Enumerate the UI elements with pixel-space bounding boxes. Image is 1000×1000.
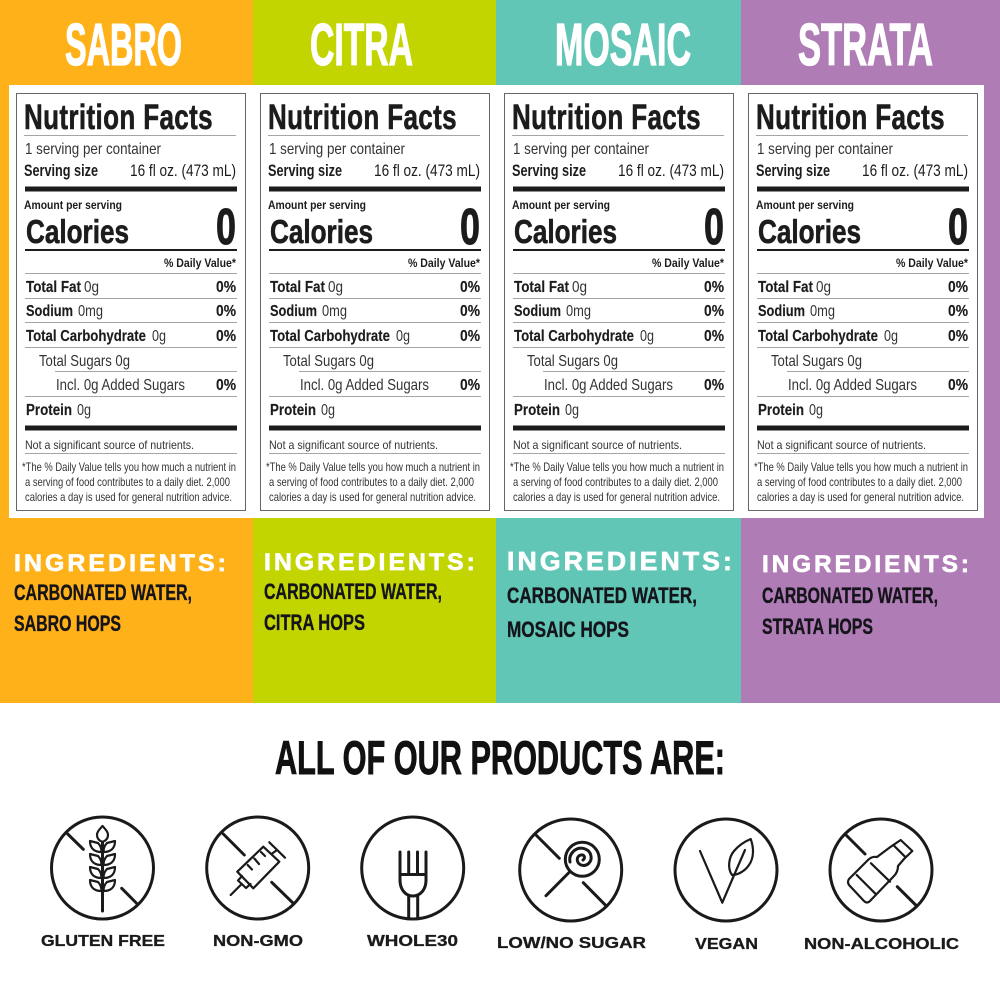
- panel: strata nutrition facts: 1 serving per container: [757, 141, 894, 158]
- panel: citra nutrition facts: 0%: [460, 328, 480, 345]
- panel: strata nutrition facts: 0: [948, 198, 968, 255]
- panel: citra nutrition facts: Calories: [270, 213, 373, 250]
- ingredients: citra: CITRA HOPS: [264, 610, 365, 635]
- panel: sabro nutrition facts: *The % Daily Value tells you how much a nutrient in: [22, 460, 236, 474]
- label: non-alcoholic: NON-ALCOHOLIC: [804, 936, 960, 953]
- panel: strata nutrition facts: Total Carbohydrate: [758, 328, 878, 345]
- panel: mosaic nutrition facts: 1 serving per container: [513, 141, 650, 158]
- panel: sabro nutrition facts: 0g: [77, 402, 91, 419]
- panel: strata nutrition facts: Not a significant source of nutrients.: [757, 438, 926, 452]
- panel: mosaic nutrition facts: Amount per serving: [512, 198, 610, 212]
- panel: citra nutrition facts: 0%: [460, 303, 480, 320]
- panel: strata nutrition facts: Incl. 0g Added Sugars: [788, 377, 917, 394]
- label: vegan: VEGAN: [695, 936, 758, 953]
- ingredients: mosaic: MOSAIC HOPS: [507, 617, 629, 642]
- ingredients: strata: STRATA HOPS: [762, 614, 873, 639]
- panel: strata nutrition facts: Total Sugars 0g: [771, 353, 862, 370]
- ingredients: mosaic: INGREDIENTS:: [507, 546, 735, 576]
- panel: mosaic nutrition facts: [504, 94, 734, 510]
- ingredients: citra: CARBONATED WATER,: [264, 579, 442, 604]
- ingredients: sabro: SABRO HOPS: [14, 611, 121, 636]
- panel: sabro nutrition facts: Total Fat: [26, 279, 82, 296]
- icon: low/no sugar lollipop: [520, 819, 622, 921]
- panel: mosaic nutrition facts: *The % Daily Value tells you how much a nutrient in: [510, 460, 724, 474]
- ingredients: sabro: INGREDIENTS:: [14, 550, 229, 577]
- panel: sabro nutrition facts: Protein: [26, 402, 72, 419]
- panel: mosaic nutrition facts: Serving size: [512, 161, 586, 180]
- panel: citra nutrition facts: 0%: [460, 279, 480, 296]
- panel: sabro nutrition facts: 0%: [216, 279, 236, 296]
- panel: strata nutrition facts: Amount per serving: [756, 198, 854, 212]
- ingredients: mosaic: CARBONATED WATER,: [507, 583, 697, 608]
- panel: sabro nutrition facts: calories a day is used for general nutrition advice.: [25, 490, 232, 504]
- icon: non-gmo syringe: [207, 817, 309, 919]
- panel: sabro nutrition facts: Amount per serving: [24, 198, 122, 212]
- ingredients: sabro: CARBONATED WATER,: [14, 580, 192, 605]
- panel: citra nutrition facts: 0%: [460, 377, 480, 394]
- panel: strata nutrition facts: Calories: [758, 213, 861, 250]
- ingredients: sabro: [14, 550, 229, 636]
- panel: mosaic nutrition facts: 0%: [704, 328, 724, 345]
- panel: citra nutrition facts: 0mg: [322, 303, 347, 320]
- icon: gluten free wheat: [52, 817, 154, 919]
- panel: sabro nutrition facts: Nutrition Facts: [24, 98, 213, 137]
- icon: non-alcoholic bottle: [830, 819, 932, 921]
- panel: citra nutrition facts: Not a significant source of nutrients.: [269, 438, 438, 452]
- panel: sabro nutrition facts: 1 serving per container: [25, 141, 162, 158]
- ingredients: strata: CARBONATED WATER,: [762, 583, 938, 608]
- panel: sabro nutrition facts: 0%: [216, 328, 236, 345]
- panel: mosaic nutrition facts: Total Sugars 0g: [527, 353, 618, 370]
- panel: citra nutrition facts: Serving size: [268, 161, 342, 180]
- panel: sabro nutrition facts: Serving size: [24, 161, 98, 180]
- panel: strata nutrition facts: 0mg: [810, 303, 835, 320]
- panel: mosaic nutrition facts: Protein: [514, 402, 560, 419]
- panel: citra nutrition facts: Amount per serving: [268, 198, 366, 212]
- icon: vegan leaf: [675, 819, 777, 921]
- panel: citra nutrition facts: Nutrition Facts: [268, 98, 457, 137]
- panel: mosaic nutrition facts: Calories: [514, 213, 617, 250]
- panel: sabro nutrition facts: 0mg: [78, 303, 103, 320]
- label: gluten free: GLUTEN FREE: [41, 933, 165, 950]
- panel: strata nutrition facts: 0%: [948, 303, 968, 320]
- panel: mosaic nutrition facts: calories a day is used for general nutrition advice.: [513, 490, 720, 504]
- column: mosaic teal: [496, 0, 741, 703]
- panel: citra nutrition facts: 0g: [328, 279, 343, 296]
- panel: sabro nutrition facts: Not a significant source of nutrients.: [25, 438, 194, 452]
- panel: citra nutrition facts: calories a day is used for general nutrition advice.: [269, 490, 476, 504]
- ingredients: citra: INGREDIENTS:: [264, 549, 478, 576]
- panel: sabro nutrition facts: [16, 94, 246, 510]
- panel: sabro nutrition facts: 0: [216, 198, 236, 255]
- heading: all of our products are: ALL OF OUR PRODUCTS ARE:: [275, 731, 725, 784]
- panel: mosaic nutrition facts: % Daily Value*: [652, 256, 724, 270]
- panel: strata nutrition facts: Protein: [758, 402, 804, 419]
- panel: citra nutrition facts: a serving of food contributes to a daily diet. 2,000: [269, 475, 474, 489]
- panel: sabro nutrition facts: 0%: [216, 303, 236, 320]
- panel: mosaic nutrition facts: 0%: [704, 279, 724, 296]
- panel: strata nutrition facts: 0g: [884, 328, 898, 345]
- panel: mosaic nutrition facts: Total Carbohydrate: [514, 328, 634, 345]
- column: citra lime: [253, 0, 496, 703]
- panel: sabro nutrition facts: % Daily Value*: [164, 256, 236, 270]
- panel: sabro nutrition facts: Calories: [26, 213, 129, 250]
- panel: strata nutrition facts: 0%: [948, 279, 968, 296]
- label: non-gmo: NON-GMO: [213, 933, 303, 950]
- panel: strata nutrition facts: 16 fl oz. (473 mL): [862, 161, 968, 180]
- panel: strata nutrition facts: Serving size: [756, 161, 830, 180]
- panel: sabro nutrition facts: 16 fl oz. (473 mL): [130, 161, 236, 180]
- heading: MOSAIC: MOSAIC: [555, 12, 691, 78]
- panel: strata nutrition facts: Total Fat: [758, 279, 814, 296]
- panel: mosaic nutrition facts: Sodium: [514, 303, 561, 320]
- panel: sabro nutrition facts: 0%: [216, 377, 236, 394]
- panel: mosaic nutrition facts: 0%: [704, 377, 724, 394]
- heading: SABRO: SABRO: [65, 12, 182, 78]
- panel: sabro nutrition facts: 0g: [84, 279, 99, 296]
- icon: whole30 fork: [362, 817, 464, 919]
- panel: citra nutrition facts: % Daily Value*: [408, 256, 480, 270]
- panel: sabro nutrition facts: 0g: [152, 328, 166, 345]
- panel: mosaic nutrition facts: 16 fl oz. (473 mL): [618, 161, 724, 180]
- panel: strata nutrition facts: 0%: [948, 328, 968, 345]
- panel: strata nutrition facts: Sodium: [758, 303, 805, 320]
- ingredients: strata: [762, 551, 972, 639]
- panel: mosaic nutrition facts: 0mg: [566, 303, 591, 320]
- panel: mosaic nutrition facts: 0g: [640, 328, 654, 345]
- panel: citra nutrition facts: Incl. 0g Added Sugars: [300, 377, 429, 394]
- panel: mosaic nutrition facts: Nutrition Facts: [512, 98, 701, 137]
- heading: CITRA: CITRA: [310, 12, 413, 78]
- panel: citra nutrition facts: 1 serving per container: [269, 141, 406, 158]
- panel: strata nutrition facts: 0%: [948, 377, 968, 394]
- panel: sabro nutrition facts: Sodium: [26, 303, 73, 320]
- panel: mosaic nutrition facts: Not a significant source of nutrients.: [513, 438, 682, 452]
- panel: citra nutrition facts: 0: [460, 198, 480, 255]
- panel: citra nutrition facts: 0g: [321, 402, 335, 419]
- panel: citra nutrition facts: Total Sugars 0g: [283, 353, 374, 370]
- panel: citra nutrition facts: Protein: [270, 402, 316, 419]
- panel: citra nutrition facts: [260, 94, 490, 510]
- panel: sabro nutrition facts: Total Carbohydrate: [26, 328, 146, 345]
- label: whole30: WHOLE30: [367, 933, 458, 950]
- label: low/no sugar: LOW/NO SUGAR: [497, 935, 647, 952]
- panel: mosaic nutrition facts: a serving of food contributes to a daily diet. 2,000: [513, 475, 718, 489]
- panel: strata nutrition facts: [748, 94, 978, 510]
- column: strata purple: [741, 0, 1000, 703]
- panel: mosaic nutrition facts: 0g: [565, 402, 579, 419]
- panel: citra nutrition facts: 0g: [396, 328, 410, 345]
- ingredients: strata: INGREDIENTS:: [762, 551, 972, 578]
- panel: sabro nutrition facts: a serving of food contributes to a daily diet. 2,000: [25, 475, 230, 489]
- panel: citra nutrition facts: Sodium: [270, 303, 317, 320]
- panel: mosaic nutrition facts: 0%: [704, 303, 724, 320]
- ingredients: citra: [264, 549, 478, 635]
- panel: strata nutrition facts: % Daily Value*: [896, 256, 968, 270]
- panel: mosaic nutrition facts: Incl. 0g Added Sugars: [544, 377, 673, 394]
- panel: sabro nutrition facts: Incl. 0g Added Sugars: [56, 377, 185, 394]
- panel: mosaic nutrition facts: 0: [704, 198, 724, 255]
- panel: citra nutrition facts: *The % Daily Value tells you how much a nutrient in: [266, 460, 480, 474]
- ingredients: mosaic: [507, 546, 735, 642]
- panel: citra nutrition facts: Total Carbohydrate: [270, 328, 390, 345]
- panel: mosaic nutrition facts: 0g: [572, 279, 587, 296]
- panel: mosaic nutrition facts: Total Fat: [514, 279, 570, 296]
- panel: sabro nutrition facts: Total Sugars 0g: [39, 353, 130, 370]
- panel: citra nutrition facts: Total Fat: [270, 279, 326, 296]
- panel: strata nutrition facts: 0g: [809, 402, 823, 419]
- white nutrition band: [9, 85, 984, 518]
- column: sabro orange: [0, 0, 253, 703]
- panel: citra nutrition facts: 16 fl oz. (473 mL): [374, 161, 480, 180]
- panel: strata nutrition facts: 0g: [816, 279, 831, 296]
